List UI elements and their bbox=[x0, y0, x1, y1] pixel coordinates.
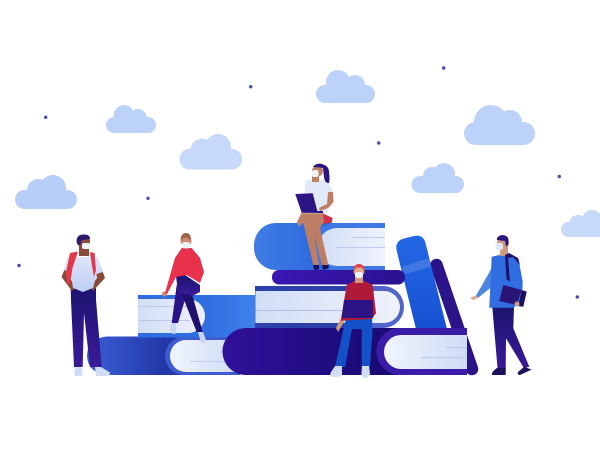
legs bbox=[302, 213, 328, 265]
t-shirt bbox=[64, 253, 103, 292]
legs bbox=[71, 288, 102, 367]
shoes bbox=[74, 367, 110, 376]
head bbox=[354, 266, 364, 276]
neck bbox=[312, 174, 319, 182]
shoes bbox=[170, 323, 206, 343]
book: thin purple book bbox=[272, 270, 405, 284]
hair bbox=[77, 234, 90, 245]
back leg bbox=[172, 285, 186, 323]
arms bbox=[62, 266, 105, 291]
hair and ponytail bbox=[313, 164, 330, 183]
neck bbox=[79, 245, 89, 256]
book: large dark navy book bbox=[222, 328, 467, 375]
hand on bag bbox=[514, 302, 520, 306]
head bbox=[497, 237, 509, 249]
cloud: left centre bbox=[180, 134, 242, 170]
hair bbox=[497, 235, 509, 246]
book: top blue book bbox=[254, 223, 385, 270]
shoulder bag: book behind bbox=[518, 290, 527, 307]
red sweater bbox=[165, 248, 204, 294]
hair bbox=[180, 233, 191, 240]
person: woman with laptop bbox=[295, 164, 334, 270]
person: woman in red sweater sitting bbox=[162, 233, 206, 343]
shoes bbox=[313, 265, 329, 270]
mask bbox=[312, 170, 318, 177]
outstretched arm bbox=[476, 268, 492, 298]
front leg bbox=[182, 294, 203, 332]
red shorts bbox=[322, 213, 333, 224]
forearm and hand bbox=[336, 318, 344, 332]
shoes bbox=[492, 367, 532, 375]
book: thin dark leaning book bbox=[436, 265, 472, 369]
book: middle book with pages bbox=[255, 286, 404, 328]
head bbox=[180, 236, 192, 246]
mask bbox=[182, 242, 190, 248]
jeans bbox=[335, 318, 372, 367]
head bbox=[312, 166, 323, 176]
cloud: right centre bbox=[412, 163, 464, 193]
pants bbox=[492, 307, 529, 370]
decorative dots bbox=[17, 66, 579, 299]
neck bbox=[500, 247, 508, 256]
neck bbox=[355, 276, 363, 283]
person: man in dark red sweater with laptop bbox=[330, 264, 376, 378]
laptop bbox=[342, 300, 373, 318]
laptop bbox=[295, 193, 323, 213]
person: man with red backpack bbox=[62, 234, 110, 376]
person: man in blue with shoulder bag bbox=[470, 235, 532, 375]
hair bbox=[353, 264, 365, 272]
backpack straps bbox=[66, 252, 96, 285]
white shirt bbox=[303, 179, 333, 213]
cloud: far right bbox=[561, 210, 600, 237]
cloud: top centre bbox=[316, 70, 375, 103]
hand bbox=[470, 296, 478, 300]
cloud: upper left bbox=[106, 105, 156, 133]
arm bbox=[319, 192, 334, 211]
blue sweater bbox=[489, 253, 523, 308]
book: standing blue book bbox=[396, 236, 447, 329]
sweater bbox=[341, 281, 376, 321]
forearm and hand bbox=[297, 212, 305, 227]
mask bbox=[496, 243, 503, 250]
book: bottom left blue book bbox=[87, 336, 240, 375]
shoes bbox=[330, 366, 370, 378]
mask bbox=[355, 272, 363, 278]
hand bbox=[162, 292, 167, 296]
thigh bbox=[176, 275, 200, 296]
bag strap bbox=[505, 253, 520, 282]
shoulder bag bbox=[499, 285, 522, 305]
cloud: far left bbox=[15, 175, 77, 209]
mask bbox=[82, 243, 90, 249]
head bbox=[77, 235, 90, 248]
cloud: upper right bbox=[464, 105, 535, 145]
book: left blue book with pages bbox=[138, 295, 255, 338]
